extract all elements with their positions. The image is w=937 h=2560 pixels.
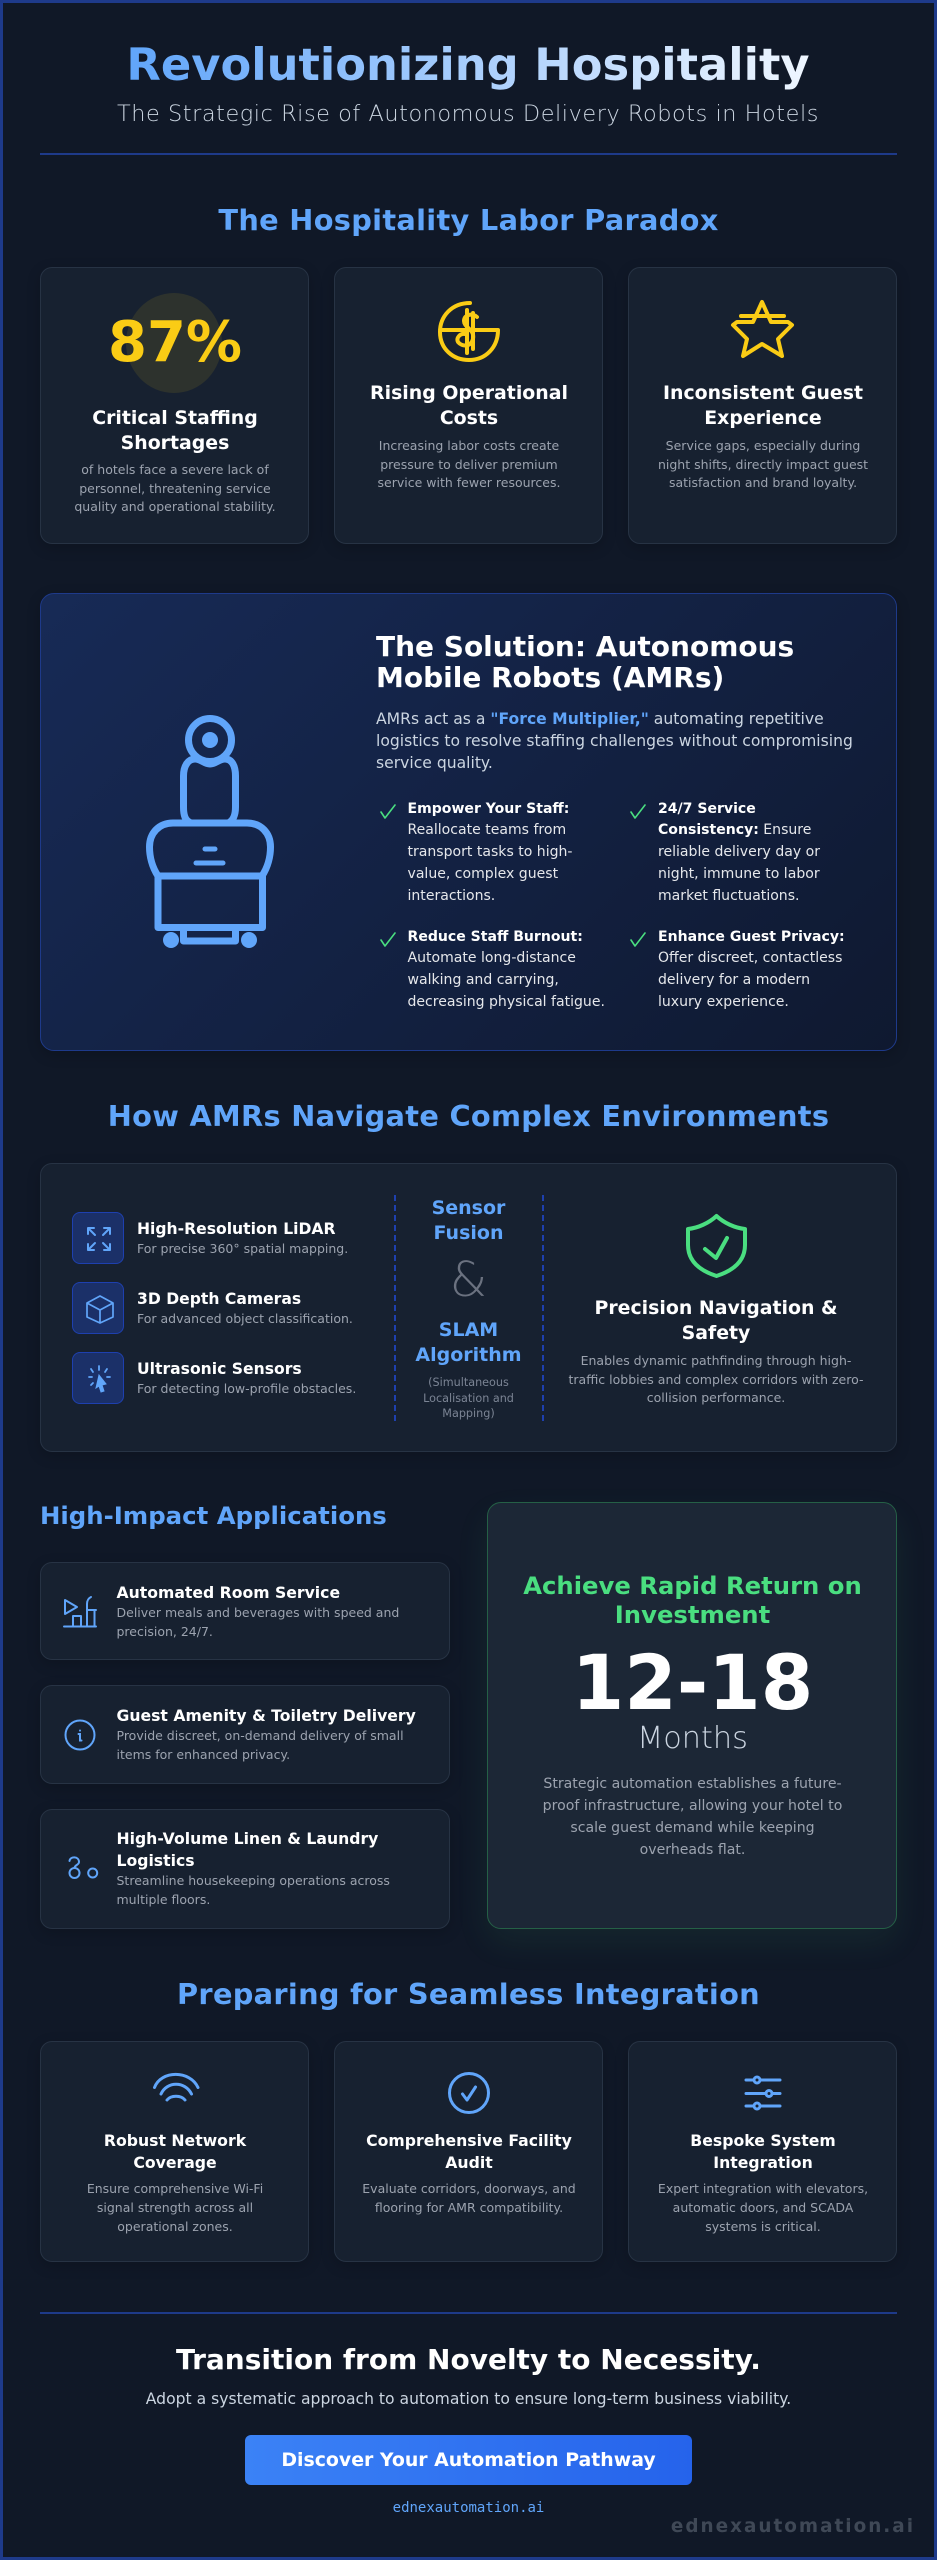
roi description: Strategic automation establishes a future-: [543, 1776, 842, 1792]
section heading: navigation: How AMRs Navigate Complex Environments: [108, 1099, 829, 1133]
integration description: Evaluate corridors, doorways, and: [362, 2181, 576, 2196]
benefit: empower your staff: Reallocate teams from: [408, 822, 566, 838]
integration description: Ensure comprehensive Wi-Fi: [87, 2181, 263, 2196]
integration description: flooring for AMR compatibility.: [375, 2200, 563, 2215]
application card: linen logistics: [40, 1809, 450, 1929]
header divider: [40, 153, 897, 155]
subtitle: The Strategic Rise of Autonomous Delivery Robots in Hotels: [117, 101, 819, 127]
benefit: reduce staff burnout: walking and carrying,: [408, 972, 559, 988]
card description: of hotels face a severe lack of: [81, 462, 269, 477]
card description: service with fewer resources.: [378, 475, 560, 490]
integration title: Comprehensive Facility: [366, 2131, 572, 2150]
sensor fusion label: [432, 1196, 506, 1244]
card description: Service gaps, especially during: [666, 438, 860, 453]
panel: rising operational costs: [334, 267, 603, 544]
card title: Critical Staffing: [92, 407, 258, 429]
card description: night shifts, directly impact guest: [658, 457, 868, 472]
icon: expand arrows: [87, 1227, 111, 1251]
card description: [658, 438, 868, 490]
integration description: [362, 2180, 576, 2218]
benefit: 24/7 service consistency: reliable delivery day or: [658, 844, 820, 860]
sensor icon box: depth camera: [72, 1282, 124, 1334]
card description: pressure to deliver premium: [380, 457, 558, 472]
solution intro: logistics to resolve staffing challenges without compromising: [376, 732, 853, 750]
sensor icon box: lidar: [72, 1212, 124, 1264]
call to action button: [245, 2435, 692, 2485]
icon: shield check: [686, 1214, 747, 1278]
card title: Rising Operational: [370, 382, 568, 404]
integration title: Integration: [713, 2153, 813, 2172]
application description: precision, 24/7.: [116, 1624, 213, 1639]
icon: check: [630, 932, 646, 947]
title: Revolutionizing Hospitality: [126, 38, 810, 91]
slam expansion: (Simultaneous: [428, 1376, 509, 1389]
application description: [116, 1605, 399, 1639]
solution intro: AMRs act as a "Force Multiplier," automating repetitive: [376, 710, 824, 728]
sensor: ultrasonic title: Ultrasonic Sensors: [137, 1360, 302, 1378]
application title: Guest Amenity & Toiletry Delivery: [116, 1706, 416, 1725]
integration card: network: [40, 2041, 309, 2262]
precision navigation title: [595, 1296, 837, 1344]
precision navigation description: collision performance.: [647, 1390, 785, 1405]
panel: navigation: [40, 1163, 897, 1452]
section heading: integration: Preparing for Seamless Integration: [177, 1977, 760, 2011]
application title: Automated Room Service: [116, 1583, 340, 1602]
benefit: enhance guest privacy: Enhance Guest Privacy:: [658, 928, 845, 944]
benefit: reduce staff burnout: Automate long-distance: [408, 950, 576, 966]
icon: check: [630, 804, 646, 819]
integration title: Audit: [445, 2153, 493, 2172]
icon: cube: [86, 1295, 114, 1324]
benefit: empower your staff: [380, 800, 572, 904]
card title: [370, 382, 568, 429]
sensor: camera description: For advanced object classification.: [137, 1311, 353, 1326]
roi description: [543, 1776, 842, 1858]
icon: room service: [63, 1596, 97, 1628]
roi heading: [523, 1571, 862, 1629]
card title: Costs: [440, 407, 498, 429]
benefit: enhance guest privacy: [630, 928, 845, 1010]
application title: Logistics: [116, 1851, 195, 1870]
card description: [74, 462, 276, 514]
solution intro: [376, 710, 853, 772]
precision navigation title: Safety: [682, 1322, 750, 1344]
roi heading: Achieve Rapid Return on: [523, 1571, 862, 1600]
integration description: systems is critical.: [705, 2219, 821, 2234]
icon: check: [380, 932, 396, 947]
card description: personnel, threatening service: [79, 481, 271, 496]
sensor fusion label: Fusion: [434, 1222, 503, 1244]
stat glow circle: [126, 293, 222, 393]
icon: robot: [146, 715, 274, 948]
panel: inconsistent guest experience: [628, 267, 897, 544]
benefit: 24/7 service consistency: Consistency: Ensure: [658, 822, 811, 838]
icon: coin with dollar: [438, 301, 500, 362]
integration title: [690, 2130, 836, 2174]
icon: linen hook: [68, 1856, 98, 1879]
integration description: automatic doors, and SCADA: [673, 2200, 853, 2215]
sensor: camera title: 3D Depth Cameras: [137, 1290, 301, 1308]
icon: star: [730, 300, 794, 358]
watermark: ednexautomation.ai: [671, 2516, 915, 2536]
application description: Provide discreet, on-demand delivery of small: [116, 1728, 404, 1743]
closing text: Adopt a systematic approach to automation to ensure long-term business viability.: [146, 2390, 791, 2408]
card title: Inconsistent Guest: [663, 382, 863, 404]
slam expansion: [423, 1376, 514, 1420]
benefit: 24/7 service consistency: 24/7 Service: [658, 800, 756, 816]
solution heading: [376, 630, 794, 694]
icon: info: [64, 1720, 96, 1750]
benefit: reduce staff burnout: decreasing physical fatigue.: [408, 994, 605, 1010]
dashed separator left: [394, 1195, 396, 1421]
icon: check circle: [447, 2071, 491, 2115]
benefit: 24/7 service consistency: [630, 800, 820, 904]
sensor: lidar title: High-Resolution LiDAR: [137, 1220, 336, 1238]
roi description: proof infrastructure, allowing your hotel to: [543, 1798, 842, 1814]
section heading: labor paradox: The Hospitality Labor Paradox: [218, 203, 719, 237]
application description: Deliver meals and beverages with speed and: [116, 1605, 399, 1620]
website url: ednexautomation.ai: [393, 2500, 544, 2516]
benefit: enhance guest privacy: luxury experience.: [658, 994, 789, 1010]
section heading: applications: High-Impact Applications: [40, 1501, 387, 1530]
card description: Increasing labor costs create: [379, 438, 559, 453]
roi description: scale guest demand while keeping: [570, 1820, 815, 1836]
benefit: empower your staff: transport tasks to high-: [408, 844, 572, 860]
card description: quality and operational stability.: [74, 499, 276, 514]
panel: the solution: [40, 593, 897, 1051]
solution heading: The Solution: Autonomous: [376, 630, 794, 663]
benefit: enhance guest privacy: delivery for a modern: [658, 972, 810, 988]
closing heading: Transition from Novelty to Necessity.: [176, 2343, 761, 2376]
card description: satisfaction and brand loyalty.: [669, 475, 857, 490]
benefit: 24/7 service consistency: night, immune to labor: [658, 866, 820, 882]
benefit: reduce staff burnout: Reduce Staff Burnout:: [408, 928, 583, 944]
integration title: Robust Network: [104, 2131, 246, 2150]
integration title: Bespoke System: [690, 2131, 836, 2150]
roi number: 12-18: [572, 1639, 813, 1727]
integration description: [87, 2180, 263, 2237]
ampersand: &: [450, 1252, 487, 1308]
precision navigation description: [568, 1353, 863, 1405]
slam expansion: Localisation and: [423, 1392, 514, 1404]
application description: items for enhanced privacy.: [116, 1747, 290, 1762]
benefit: reduce staff burnout: [380, 928, 605, 1010]
application card: room service: [40, 1562, 450, 1660]
footer divider: [40, 2312, 897, 2314]
slam label: [415, 1318, 522, 1366]
application description: Streamline housekeeping operations across: [116, 1873, 390, 1888]
precision navigation description: traffic lobbies and complex corridors with zero-: [569, 1372, 863, 1387]
card title: [92, 407, 258, 454]
roi heading: Investment: [615, 1600, 770, 1629]
stat: 87%: 87%: [108, 310, 242, 375]
panel: critical staffing shortages: [40, 267, 309, 544]
slam label: SLAM: [439, 1318, 498, 1340]
integration title: [366, 2130, 572, 2174]
icon: wifi: [153, 2072, 200, 2102]
solution heading: Mobile Robots (AMRs): [376, 661, 724, 694]
sensor: lidar description: For precise 360° spatial mapping.: [137, 1241, 348, 1256]
integration card: audit: [334, 2041, 603, 2262]
card title: Experience: [704, 407, 822, 429]
benefit: empower your staff: interactions.: [408, 888, 495, 904]
application title: High-Volume Linen & Laundry: [116, 1829, 378, 1848]
solution intro: service quality.: [376, 754, 493, 772]
integration card: system: [628, 2041, 897, 2262]
benefit: empower your staff: Empower Your Staff:: [408, 800, 569, 816]
precision navigation title: Precision Navigation &: [595, 1296, 837, 1318]
application description: multiple floors.: [116, 1892, 210, 1907]
application description: [116, 1728, 404, 1762]
card title: [663, 382, 863, 429]
integration description: Expert integration with elevators,: [658, 2181, 868, 2196]
integration title: [104, 2131, 246, 2172]
slam expansion: Mapping): [442, 1407, 495, 1420]
precision navigation description: Enables dynamic pathfinding through high-: [581, 1353, 851, 1368]
card description: [378, 438, 560, 490]
application description: [116, 1873, 390, 1907]
integration description: signal strength across all: [97, 2200, 253, 2215]
application card: amenity delivery: [40, 1685, 450, 1784]
application title: [116, 1829, 378, 1870]
sensor icon box: ultrasonic: [72, 1352, 124, 1404]
card title: Shortages: [121, 432, 229, 454]
slam label: Algorithm: [415, 1344, 522, 1366]
icon: sliders: [743, 2076, 783, 2110]
icon: check: [380, 804, 396, 819]
call to action button: Discover Your Automation Pathway: [281, 2449, 656, 2471]
panel: return on investment: [487, 1502, 897, 1929]
sensor fusion label: Sensor: [432, 1196, 505, 1218]
integration title: Coverage: [133, 2153, 217, 2172]
benefit: enhance guest privacy: Offer discreet, contactless: [658, 950, 842, 966]
benefit: 24/7 service consistency: market fluctuations.: [658, 888, 800, 904]
header: [40, 38, 897, 155]
integration description: operational zones.: [117, 2219, 233, 2234]
icon: cursor with rays: [88, 1365, 111, 1393]
dashed separator right: [542, 1195, 544, 1421]
benefit: empower your staff: value, complex guest: [408, 866, 558, 882]
sensor: ultrasonic description: For detecting low-profile obstacles.: [137, 1381, 356, 1396]
roi unit: Months: [637, 1720, 748, 1756]
integration description: [658, 2180, 868, 2237]
roi description: overheads flat.: [640, 1842, 745, 1858]
